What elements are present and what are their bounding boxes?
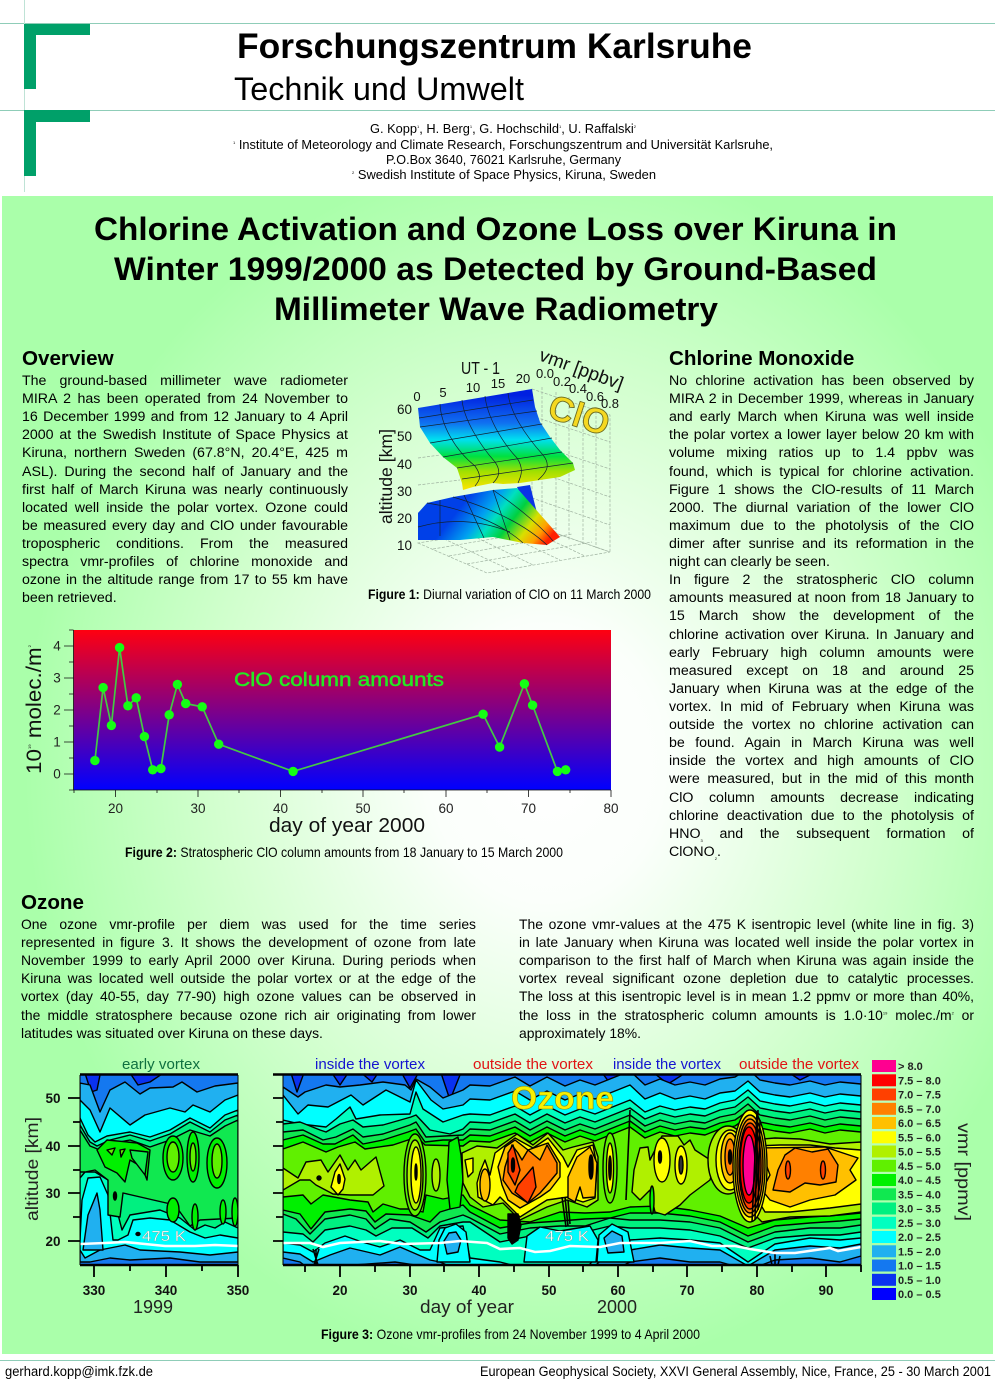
figure 3 caption: Figure 3: Ozone vmr-profiles from 24 November 1999 to 4 April 2000: [321, 1326, 700, 1342]
blue patch near day 33: [437, 1224, 470, 1262]
text block: Ozone right: The loss at this isentropic level is in mean 1.2 ppmv or more than 40%,: [519, 988, 974, 1004]
header: authors and affiliations: , G. Hochschild: [472, 122, 559, 136]
axis labels: UT - 1: [461, 358, 500, 378]
header: institution name: Technik und Umwelt: [234, 71, 524, 107]
bright green gap: [447, 1137, 463, 1209]
tick labels: 30: [402, 1283, 418, 1298]
heading: Ozone: Ozone: [21, 891, 84, 914]
tick labels: [45, 1091, 249, 1298]
footer: [0, 1360, 995, 1379]
475 K isentrope: [80, 1242, 238, 1246]
legend: vmr colour scale: 3.5 – 4.0: [898, 1190, 941, 1202]
text block: Chlorine Monoxide: volume mixing ratios up to 1.4 ppbv was: [669, 445, 974, 461]
475 K label: 475 K: [545, 1228, 589, 1245]
header: authors and affiliations: P.O.Box 3640, 76021 Karlsruhe, Germany: [386, 153, 622, 167]
heading: Overview: Overview: [22, 347, 114, 370]
legend: vmr colour scale: 4.5 – 5.0: [898, 1161, 941, 1173]
heading: Chlorine Monoxide: Chlorine Monoxide: [669, 347, 854, 370]
tick labels: [53, 638, 619, 816]
text block: Chlorine Monoxide: In figure 2 the stratospheric ClO column: [669, 572, 974, 588]
legend: vmr colour scale: 3.0 – 3.5: [898, 1204, 941, 1216]
text block: Chlorine Monoxide: the polar vortex a lower layer below 20 km with: [669, 427, 974, 443]
text block: Chlorine Monoxide: chlorine activation over Kiruna. In January and: [669, 627, 974, 643]
text block: Overview: located well inside the polar vortex. Ozone could: [22, 500, 348, 516]
tick labels: 350: [227, 1283, 249, 1298]
tick labels: 340: [155, 1283, 177, 1298]
text block: Overview: be measured every day and ClO under favourable: [22, 518, 348, 534]
text block: Overview: [22, 373, 348, 606]
text block: Ozone left: [21, 916, 476, 1041]
text block: Chlorine Monoxide: chlorine deactivation due to the photolysis of: [669, 808, 974, 824]
axis labels: 15: [491, 376, 505, 391]
tick labels: 80: [603, 801, 619, 816]
title: [94, 211, 897, 327]
header: authors and affiliations: G. Kopp: [370, 122, 416, 136]
axis labels: [376, 344, 627, 553]
upper surface: [418, 389, 575, 490]
text block: Overview: 2000 at the Swedish Institute of Space Physics at: [22, 427, 348, 443]
tick labels: 30: [45, 1186, 61, 1201]
text block: Overview: Kiruna, northern Sweden (67.8°N, 20.4°E, 425 m: [22, 445, 348, 461]
header: authors and affiliations: 1: [233, 140, 236, 145]
text block: Chlorine Monoxide: were measured, but in the mid of this month: [669, 771, 974, 787]
text block: Ozone right: comparison to the first half of March when Kiruna was again inside the: [519, 952, 974, 968]
header: institution name: [234, 26, 752, 107]
text block: Overview: The ground-based millimeter wave radiometer: [22, 373, 348, 389]
x axis labels: 2000: [597, 1297, 637, 1317]
legend: vmr colour scale: 1.5 – 2.0: [898, 1246, 941, 1258]
chart inner label: ClO column amounts: [234, 670, 444, 691]
tick labels: 90: [818, 1283, 834, 1298]
text block: Ozone left: the middle stratosphere because ozone rich air originating from lower: [21, 1007, 476, 1023]
text block: Chlorine Monoxide: HNO3 and the subsequent formation of: [669, 826, 974, 843]
x axis labels: [420, 1297, 637, 1317]
text block: Chlorine Monoxide: outside the vortex no chlorine activation can: [669, 717, 974, 733]
text block: Chlorine Monoxide: inside the vortex and high amounts of ClO: [669, 753, 974, 769]
axis labels: 0.2: [553, 374, 571, 389]
text block: Chlorine Monoxide: maximum due to the photolysis of the ClO: [669, 518, 974, 534]
tick labels: 20: [332, 1283, 348, 1298]
text block: Chlorine Monoxide: night can clearly be seen.: [669, 554, 830, 570]
Ozone label: Ozone: [511, 1080, 614, 1116]
header: authors and affiliations: , U. Raffalski: [561, 122, 634, 136]
legend: vmr colour scale: 0.5 – 1.0: [898, 1275, 941, 1287]
tick labels: 40: [273, 801, 288, 816]
tick labels: 40: [471, 1283, 487, 1298]
text block: Ozone right: vortex reveal significant ozone depletion due to catalytic processes.: [519, 970, 974, 986]
tick labels: 50: [541, 1283, 557, 1298]
header: authors and affiliations: , H. Berg: [419, 122, 470, 136]
year label: 1999: [133, 1297, 173, 1317]
text block: Chlorine Monoxide: January when Kiruna was at the edge of the: [669, 681, 974, 697]
x axis labels: day of year: [420, 1297, 514, 1317]
tick labels: 330: [83, 1283, 105, 1298]
tick labels: 3: [53, 670, 61, 686]
title: Winter 1999/2000 as Detected by Ground-Based: [114, 251, 877, 287]
header: authors and affiliations: 1: [559, 124, 562, 129]
figure 1 caption: Figure 1: Diurnal variation of ClO on 11 March 2000: [368, 586, 651, 602]
legend: vmr colour scale: 1.0 – 1.5: [898, 1261, 941, 1273]
header: authors and affiliations: 1: [470, 124, 473, 129]
text block: Ozone left: November 1999 to early April 2000 over Kiruna. During periods when: [21, 952, 476, 968]
text block: Chlorine Monoxide: [669, 373, 974, 861]
axis labels: 10: [466, 380, 480, 395]
axis labels: 40: [397, 457, 412, 472]
text block: Ozone left: Kiruna was located well outside the polar vortex or at the edge of the: [21, 970, 476, 986]
figure 3 period labels: early vortex: [122, 1057, 201, 1073]
legend: vmr colour scale: 7.0 – 7.5: [898, 1090, 941, 1102]
tick labels: 70: [679, 1283, 695, 1298]
text block: Chlorine Monoxide: No chlorine activation has been observed by: [669, 373, 974, 389]
tick labels: [332, 1283, 834, 1298]
header: authors and affiliations: 2: [634, 124, 637, 129]
legend axis title: vmr [ppmv]: [954, 1123, 974, 1221]
title: Millimeter Wave Radiometry: [274, 291, 718, 327]
legend: vmr colour scale: 5.0 – 5.5: [898, 1147, 941, 1159]
475 K isentrope: [283, 1241, 861, 1253]
figure 3 period labels: inside the vortex: [315, 1057, 426, 1073]
legend: vmr colour scale: 2.5 – 3.0: [898, 1218, 941, 1230]
text block: Chlorine Monoxide: measured except on 18 and around 25: [669, 663, 974, 679]
text block: Chlorine Monoxide: and early March when Kiruna was well inside: [669, 409, 974, 425]
data points: [90, 643, 570, 776]
text block: Ozone right: the loss in the stratospheric column amounts is 1.0·1019 molec./m2 or: [519, 1007, 974, 1023]
tick labels: 60: [610, 1283, 626, 1298]
475 K label: 475 K: [142, 1228, 186, 1245]
header: institution name: Forschungszentrum Karlsruhe: [237, 26, 752, 66]
tick labels: 1: [53, 734, 61, 750]
tick labels: 30: [190, 801, 206, 816]
axis labels: 20: [516, 371, 530, 386]
tick labels: 20: [108, 801, 123, 816]
text block: Chlorine Monoxide: vortex. In mid of February when Kiruna was: [669, 699, 974, 715]
x axis label: day of year 2000: [269, 814, 425, 837]
axis labels: 20: [397, 511, 412, 526]
axis labels: 30: [397, 484, 412, 499]
legend: vmr colour scale: 2.0 – 2.5: [898, 1232, 941, 1244]
frame and ticks: [273, 1074, 861, 1277]
axis labels: 0.8: [601, 396, 619, 411]
tick labels: 2: [53, 702, 61, 718]
text block: Overview: MIRA 2 has been operated from 24 November to: [22, 391, 348, 407]
text block: Overview: ozone in the altitude range from 17 to 55 km have: [22, 572, 348, 588]
tick labels: 20: [45, 1234, 61, 1249]
figure 3 period labels: outside the vortex: [473, 1057, 594, 1073]
text block: Ozone right: The ozone vmr-values at the 475 K isentropic level (white line in fig. 3): [519, 916, 974, 932]
legend: vmr colour scale: [872, 1060, 974, 1301]
tick labels: 50: [45, 1091, 61, 1106]
text block: Chlorine Monoxide: found, which is typical for chlorine activation.: [669, 464, 974, 480]
text block: Ozone right: in late January when Kiruna was located well inside the polar vortex in: [519, 934, 974, 950]
text block: Ozone left: vortex (day 40-55, day 77-90) high ozone values can be observed in: [21, 988, 476, 1004]
y axis label: 2: [27, 644, 32, 647]
header: authors and affiliations: [233, 122, 773, 182]
legend: vmr colour scale: 6.0 – 6.5: [898, 1118, 941, 1130]
text block: Overview: 16 December 1999 and from 12 January to 4 April: [22, 409, 348, 425]
text block: Chlorine Monoxide: 15 March show the development of the: [669, 608, 974, 624]
axis labels: 0: [413, 389, 421, 404]
axis labels: 50: [397, 429, 412, 444]
lower surface back: [517, 485, 537, 517]
axis labels: vmr [ppbv]: [537, 344, 627, 394]
figure 3 period labels: [122, 1057, 860, 1073]
tick labels: 0: [53, 766, 61, 782]
legend: vmr colour scale: > 8.0: [898, 1061, 923, 1073]
grid walls and floor: [418, 387, 610, 573]
axis labels: 5: [439, 385, 447, 400]
legend: vmr colour scale: 6.5 – 7.0: [898, 1104, 941, 1116]
text block: Chlorine Monoxide: amounts measured at noon from 18 January to: [669, 590, 974, 606]
text block: Overview: been retrieved.: [22, 590, 117, 606]
text block: Chlorine Monoxide: 2000. The diurnal variation of the lower ClO: [669, 500, 974, 516]
text block: Overview: spectra vmr-profiles of chlorine monoxide and: [22, 554, 348, 570]
text block: Ozone left: latitudes was situated over Kiruna on these days.: [21, 1025, 323, 1041]
header: authors and affiliations: 2: [352, 170, 355, 175]
text block: Ozone right: approximately 18%.: [519, 1025, 641, 1041]
axis labels: 60: [397, 402, 412, 417]
text block: Overview: tropospheric conditions. From the measured: [22, 536, 348, 552]
axis labels: 0.0: [536, 366, 554, 381]
axis labels: 0.4: [569, 381, 587, 396]
text block: Chlorine Monoxide: ClO column amounts decrease indicating: [669, 790, 974, 806]
tick labels: 4: [53, 638, 61, 654]
tick labels: 70: [521, 801, 536, 816]
footer: gerhard.kopp@imk.fzk.de: [5, 1364, 153, 1379]
tick labels: 80: [749, 1283, 765, 1298]
dark contour clusters: [508, 1214, 521, 1244]
text block: Ozone left: represented in figure 3. It shows the development of ozone from late: [21, 934, 476, 950]
tick labels: 50: [355, 801, 371, 816]
y axis label: molec./m: [23, 647, 46, 744]
header: authors and affiliations: Swedish Institute of Space Physics, Kiruna, Sweden: [354, 168, 656, 182]
text block: Chlorine Monoxide: dimer after sunrise and its reformation in the: [669, 536, 974, 552]
plot area gradient: [74, 630, 611, 790]
axis labels: 0.6: [586, 389, 604, 404]
figure 3: contour plot 2000: [273, 1069, 861, 1317]
data line: [95, 648, 566, 771]
axis labels: altitude [km]: [376, 429, 396, 524]
legend: vmr colour scale: 0.0 – 0.5: [898, 1289, 941, 1301]
figure 2 caption: Figure 2: Stratospheric ClO column amounts from 18 January to 15 March 2000: [125, 844, 563, 860]
legend: vmr colour scale: 5.5 – 6.0: [898, 1132, 941, 1144]
text block: Overview: first half of March Kiruna was nearly continuously: [22, 482, 348, 498]
axis labels: 10: [397, 538, 412, 553]
text block: Chlorine Monoxide: MIRA 2 in December 1999, whereas in January: [669, 391, 974, 407]
lower surface: [418, 488, 560, 545]
text block: Ozone right: [519, 916, 974, 1041]
header: authors and affiliations: Institute of Meteorology and Climate Research, Forschungszentrum and Universität Karlsruhe,: [235, 138, 773, 152]
text block: Chlorine Monoxide: be found. Again in March Kiruna was well: [669, 735, 974, 751]
figure 3 period labels: outside the vortex: [739, 1057, 860, 1073]
frame and ticks: [68, 1074, 238, 1277]
tick labels: 40: [45, 1139, 61, 1154]
title: Chlorine Activation and Ozone Loss over Kiruna in: [94, 211, 897, 247]
y axis label: altitude [km]: [22, 1117, 42, 1221]
y axis label: 10: [23, 751, 46, 774]
text block: Overview: ASL). During the second half of January and the: [22, 464, 348, 480]
text block: Chlorine Monoxide: early February high column amounts were: [669, 645, 974, 661]
tick labels: 60: [438, 801, 454, 816]
figure 3: contour plot 1999: [22, 1070, 249, 1317]
y axis label: 19: [27, 744, 32, 749]
legend: vmr colour scale: 7.5 – 8.0: [898, 1076, 941, 1088]
figure 3 period labels: inside the vortex: [613, 1057, 722, 1073]
header rules and logo brackets: [0, 0, 995, 192]
ClO label: ClO: [544, 388, 615, 444]
figure 1: 3D ClO surface plot: [376, 344, 627, 573]
text block: Chlorine Monoxide: Figure 1 shows the ClO-results of 11 March: [669, 482, 974, 498]
text block: Chlorine Monoxide: ClONO2.: [669, 844, 721, 861]
legend: vmr colour scale: 4.0 – 4.5: [898, 1175, 941, 1187]
figure 2: ClO column amounts chart: [23, 630, 619, 837]
axes and ticks: [64, 630, 611, 797]
header: authors and affiliations: 1: [417, 124, 420, 129]
text block: Ozone left: One ozone vmr-profile per diem was used for the time series: [21, 916, 476, 932]
